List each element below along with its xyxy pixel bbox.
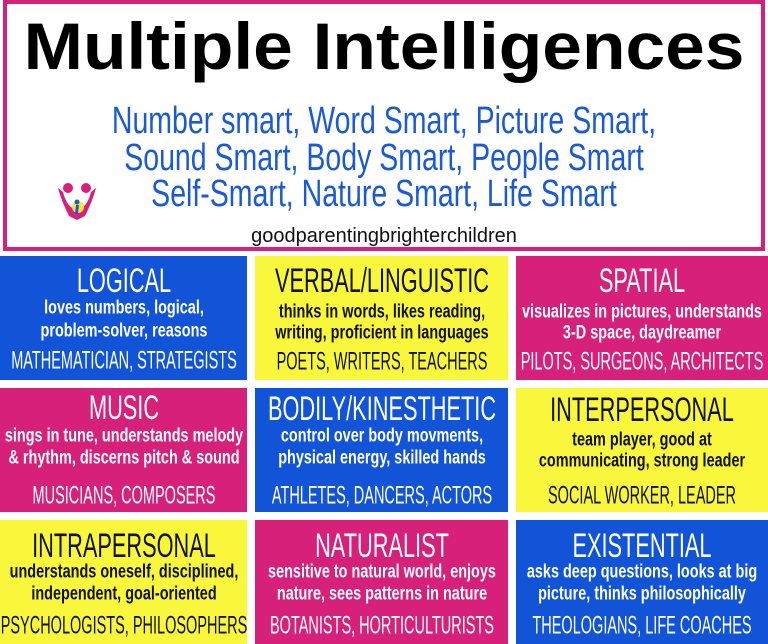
panel: naturalist: nature, sees patterns in nature — [276, 584, 487, 604]
subtitle: Number smart, Word Smart, Picture Smart, — [112, 100, 656, 142]
panel: interpersonal: SOCIAL WORKER, LEADER — [548, 482, 736, 510]
panel: existential: picture, thinks philosophically — [538, 584, 746, 604]
panel: naturalist: sensitive to natural world, enjoys — [268, 562, 495, 582]
panel: bodily: physical energy, skilled hands — [278, 448, 485, 468]
panel: spatial: SPATIAL — [599, 262, 685, 300]
panel: intrapersonal — [0, 520, 247, 644]
panel: existential: THEOLOGIANS, LIFE COACHES — [532, 612, 752, 640]
panel: music: MUSIC — [88, 389, 159, 427]
panel: logical — [0, 256, 247, 380]
panel: spatial — [516, 256, 768, 380]
title: Multiple Intelligences — [24, 9, 744, 83]
panel: spatial: visualizes in pictures, understands — [522, 302, 762, 322]
panel: bodily: ATHLETES, DANCERS, ACTORS — [271, 482, 492, 510]
panel: naturalist: BOTANISTS, HORTICULTURISTS — [270, 612, 493, 640]
panel: music: & rhythm, discerns pitch & sound — [8, 448, 239, 468]
panel: existential — [516, 520, 768, 644]
panel: logical: LOGICAL — [76, 262, 171, 300]
panel: bodily: control over body movments, — [280, 426, 483, 446]
panel: logical: MATHEMATICIAN, STRATEGISTS — [11, 346, 236, 374]
panel: intrapersonal: independent, goal-oriented — [31, 584, 216, 604]
panel: naturalist: NATURALIST — [315, 527, 448, 565]
panel: naturalist — [255, 520, 508, 644]
panel: interpersonal: team player, good at — [572, 430, 712, 450]
panel: verbal: writing, proficient in languages — [275, 322, 488, 344]
panel: bodily: BODILY/KINESTHETIC — [267, 390, 496, 428]
panel: spatial: 3-D space, daydreamer — [563, 322, 721, 344]
panel: existential: EXISTENTIAL — [572, 527, 712, 565]
panel: intrapersonal: INTRAPERSONAL — [32, 527, 215, 565]
panel: logical: loves numbers, logical, — [44, 298, 203, 318]
panel: intrapersonal: understands oneself, disciplined, — [9, 562, 238, 582]
header panel — [3, 0, 765, 251]
panel: interpersonal — [516, 388, 768, 512]
subtitle — [112, 100, 656, 215]
panel: existential: asks deep questions, looks at big — [527, 562, 757, 582]
panel: verbal: POETS, WRITERS, TEACHERS — [276, 348, 487, 376]
panel: music — [0, 388, 247, 512]
panel: verbal: thinks in words, likes reading, — [278, 302, 485, 322]
subtitle: Self-Smart, Nature Smart, Life Smart — [151, 173, 617, 215]
panel: logical: problem-solver, reasons — [40, 320, 207, 342]
panel: verbal — [255, 256, 508, 380]
panel: music: MUSICIANS, COMPOSERS — [32, 482, 215, 510]
subtitle: Sound Smart, Body Smart, People Smart — [124, 137, 644, 179]
panel: interpersonal: INTERPERSONAL — [550, 391, 734, 429]
panel: verbal: VERBAL/LINGUISTIC — [274, 262, 489, 300]
website: goodparentingbrighterchildren — [251, 225, 517, 247]
panel: intrapersonal: PSYCHOLOGISTS, PHILOSOPHERS — [0, 612, 247, 640]
icon: logo — [58, 183, 96, 220]
panel: interpersonal: communicating, strong leader — [539, 450, 745, 472]
panel: bodily — [255, 388, 508, 512]
panel: spatial: PILOTS, SURGEONS, ARCHITECTS — [521, 348, 763, 376]
panel: music: sings in tune, understands melody — [4, 426, 243, 446]
